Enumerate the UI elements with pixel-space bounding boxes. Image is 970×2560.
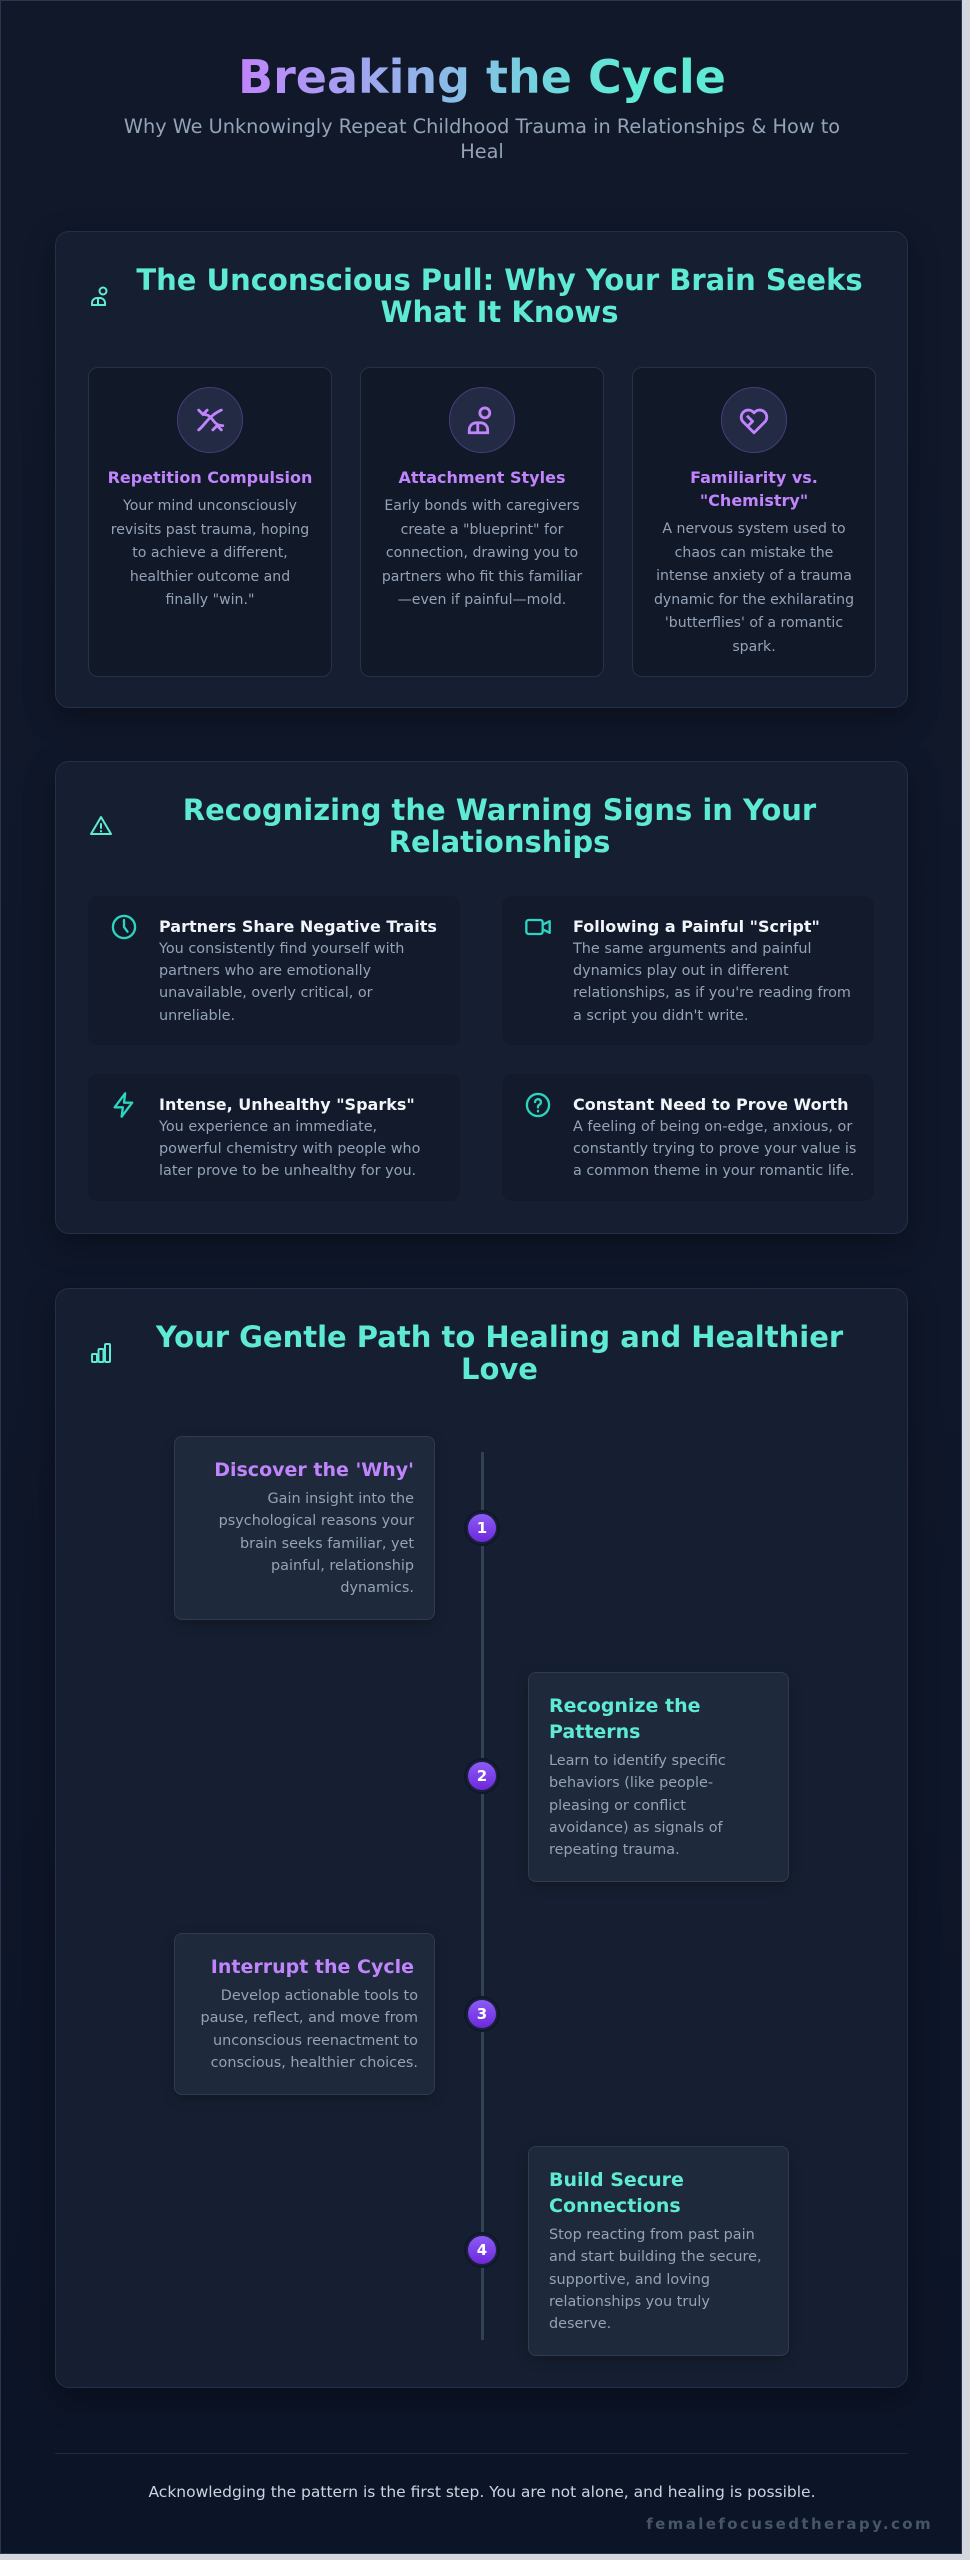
step 1 marker: [466, 1512, 498, 1544]
panel: warning signs: [55, 761, 908, 1234]
heading: warning signs: Recognizing the Warning Signs in Your Relationships: [183, 793, 816, 859]
warning: negative traits: You consistently find yourself with partners who are emotionally unavailable, overly critical, or unreliable.: [159, 941, 404, 1024]
step 1 marker: 1: [477, 1519, 487, 1537]
warning: negative traits: [88, 896, 460, 1045]
card: repetition compulsion: [88, 367, 332, 677]
heading: healing path: Your Gentle Path to Healing and Healthier Love: [156, 1320, 843, 1386]
card: attachment styles: Attachment Styles: [399, 468, 565, 487]
icon: clock: [112, 914, 136, 940]
step 4 marker: 4: [477, 2241, 487, 2259]
icon: repeat arrows: [177, 387, 243, 453]
subtitle: Why We Unknowingly Repeat Childhood Trauma in Relationships & How to Heal: [124, 115, 840, 163]
panel: unconscious pull: [55, 231, 908, 708]
step 1 card: Gain insight into the psychological reasons your brain seeks familiar, yet painful, relationship dynamics.: [219, 1491, 414, 1596]
icon: heart: [721, 387, 787, 453]
timeline line: [481, 1452, 484, 2340]
warning: prove worth: [502, 1074, 874, 1201]
card: familiarity vs chemistry: Familiarity vs. "Chemistry": [690, 468, 818, 510]
warning: negative traits: Partners Share Negative Traits: [159, 917, 437, 936]
warning: sparks: [88, 1074, 460, 1201]
warning: sparks: You experience an immediate, powerful chemistry with people who later prove to be unhealthy for you.: [159, 1119, 420, 1179]
step 2 card: Learn to identify specific behaviors (like people-pleasing or conflict avoidance) as signals of repeating trauma.: [549, 1753, 726, 1858]
step 1 card: Discover the 'Why': [214, 1459, 414, 1481]
footer message: Acknowledging the pattern is the first step. You are not alone, and healing is possible.: [148, 2483, 816, 2501]
brand: femalefocusedtherapy.com: [646, 2515, 933, 2533]
warning: prove worth: Constant Need to Prove Worth: [573, 1095, 848, 1114]
icon: lightning: [113, 1092, 134, 1118]
step 3 card: Interrupt the Cycle: [211, 1956, 414, 1978]
warning: painful script: Following a Painful "Script": [573, 917, 820, 936]
step 2 marker: 2: [477, 1767, 487, 1785]
step 3 marker: [466, 1998, 498, 2030]
heading: unconscious pull: The Unconscious Pull: Why Your Brain Seeks What It Knows: [136, 263, 863, 329]
warning: painful script: The same arguments and painful dynamics play out in different relationships, as if you're reading from a script you didn't write.: [573, 941, 851, 1024]
warning: sparks: Intense, Unhealthy "Sparks": [159, 1095, 415, 1114]
warning: painful script: [502, 896, 874, 1045]
step 2 card: Recognize the Patterns: [549, 1695, 701, 1743]
step 4 card: Build Secure Connections: [549, 2169, 684, 2217]
step 2 card: [528, 1672, 789, 1882]
warning: prove worth: A feeling of being on-edge, anxious, or constantly trying to prove your value is a common theme in your romantic life.: [573, 1119, 856, 1179]
step 4 marker: [466, 2234, 498, 2266]
icon: question: [526, 1092, 550, 1118]
step 3 card: [174, 1933, 435, 2095]
card: familiarity vs chemistry: A nervous system used to chaos can mistake the intense anxiety of a trauma dynamic for the exhilarating 'butterflies' of a romantic spark.: [654, 521, 854, 654]
step 4 card: [528, 2146, 789, 2356]
panel: healing path: [55, 1288, 908, 2388]
step 3 marker: 3: [477, 2005, 487, 2023]
card: familiarity vs chemistry: [632, 367, 876, 677]
step 2 marker: [466, 1760, 498, 1792]
card: attachment styles: Early bonds with caregivers create a "blueprint" for connection, drawing you to partners who fit this familiar—even if painful—mold.: [382, 498, 582, 608]
step 4 card: Stop reacting from past pain and start building the secure, supportive, and loving relationships you truly deserve.: [549, 2227, 762, 2332]
step 1 card: [174, 1436, 435, 1620]
icon: users: [449, 387, 515, 453]
title: Breaking the Cycle: [238, 50, 726, 104]
card: attachment styles: [360, 367, 604, 677]
card: repetition compulsion: Your mind unconsciously revisits past trauma, hoping to achieve a different, healthier outcome and finally "win.": [111, 498, 309, 608]
step 3 card: Develop actionable tools to pause, reflect, and move from unconscious reenactment to conscious, healthier choices.: [200, 1988, 418, 2071]
icon: video: [525, 918, 551, 936]
card: repetition compulsion: Repetition Compulsion: [108, 468, 312, 487]
